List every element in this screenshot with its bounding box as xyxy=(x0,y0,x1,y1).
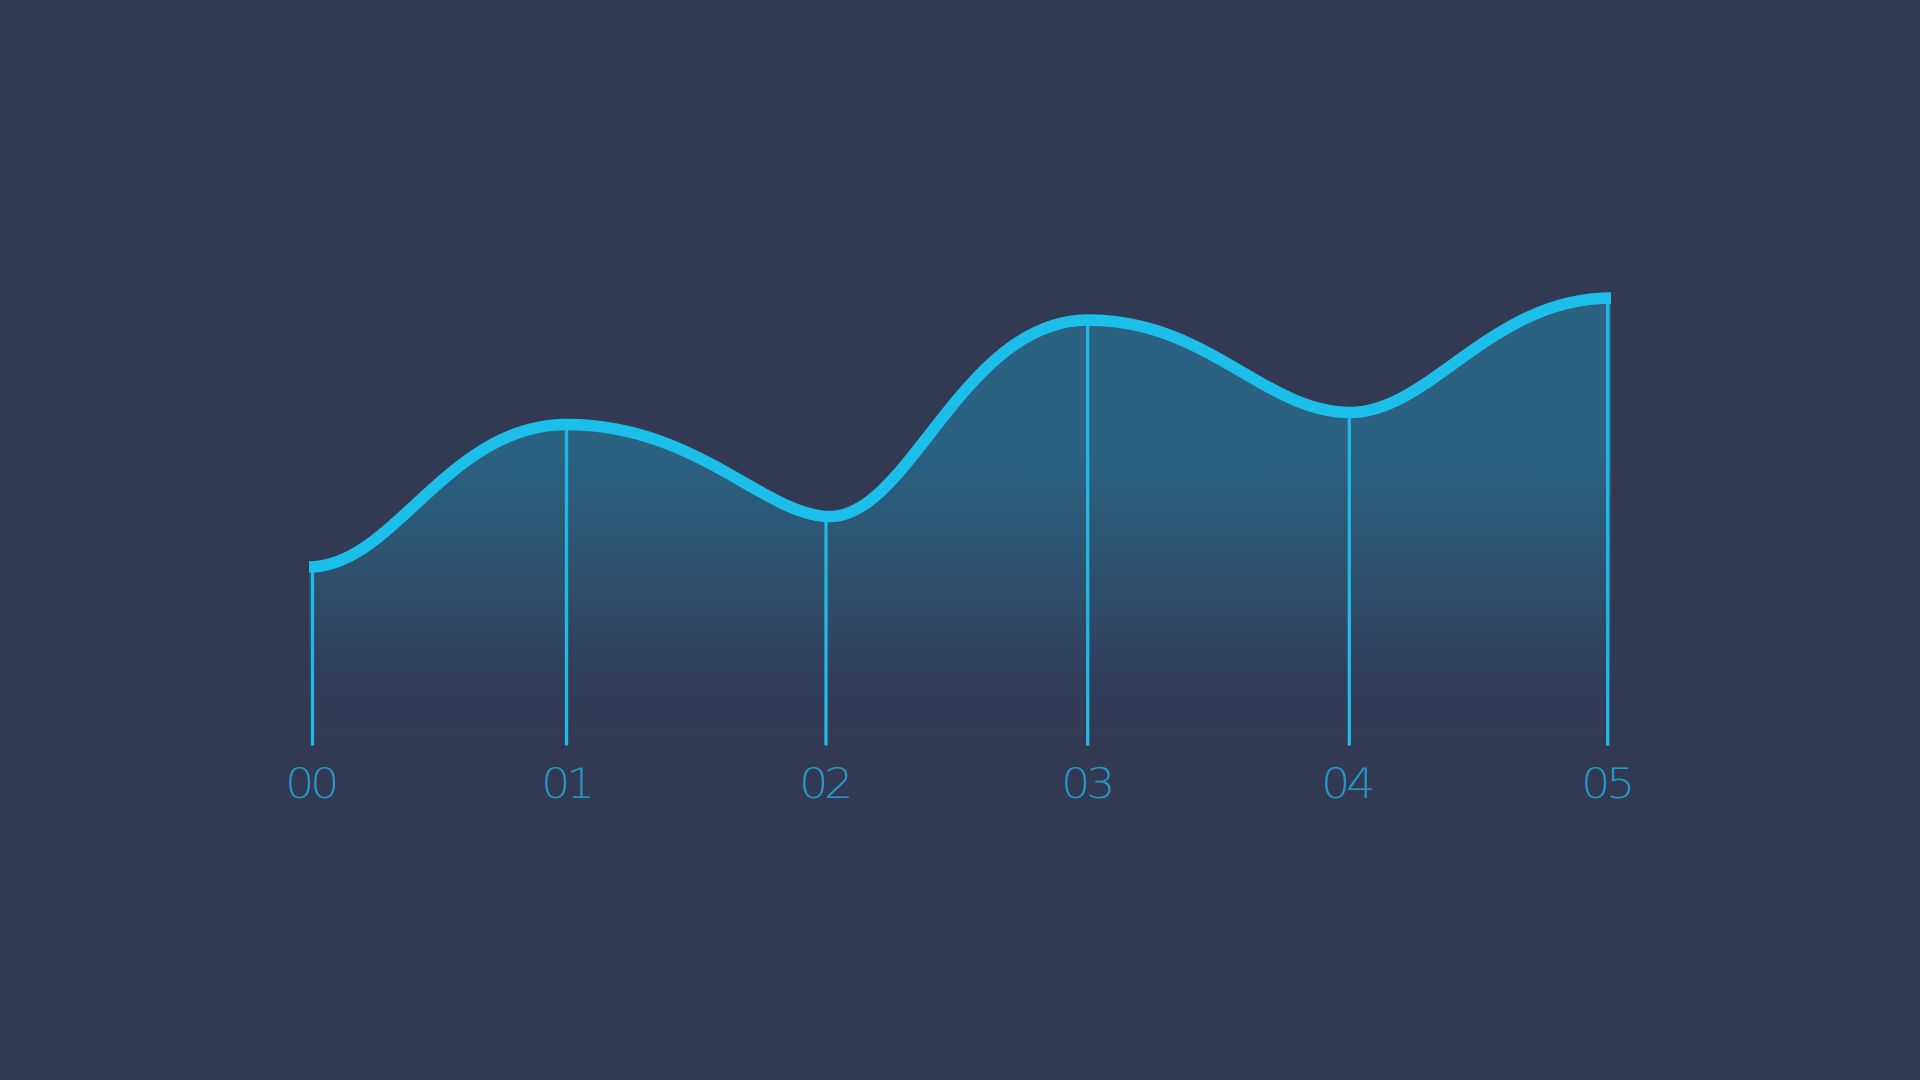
curve line xyxy=(309,298,1611,567)
label 04: 04 xyxy=(1321,760,1372,808)
axis labels xyxy=(285,760,1631,808)
gradient area fill xyxy=(309,298,1611,746)
label 05: 05 xyxy=(1581,760,1631,808)
vertical marker lines xyxy=(312,298,1608,746)
label 02: 02 xyxy=(799,760,849,808)
label 03: 03 xyxy=(1061,760,1111,808)
label 00: 00 xyxy=(285,760,335,808)
label 01: 01 xyxy=(541,760,591,808)
